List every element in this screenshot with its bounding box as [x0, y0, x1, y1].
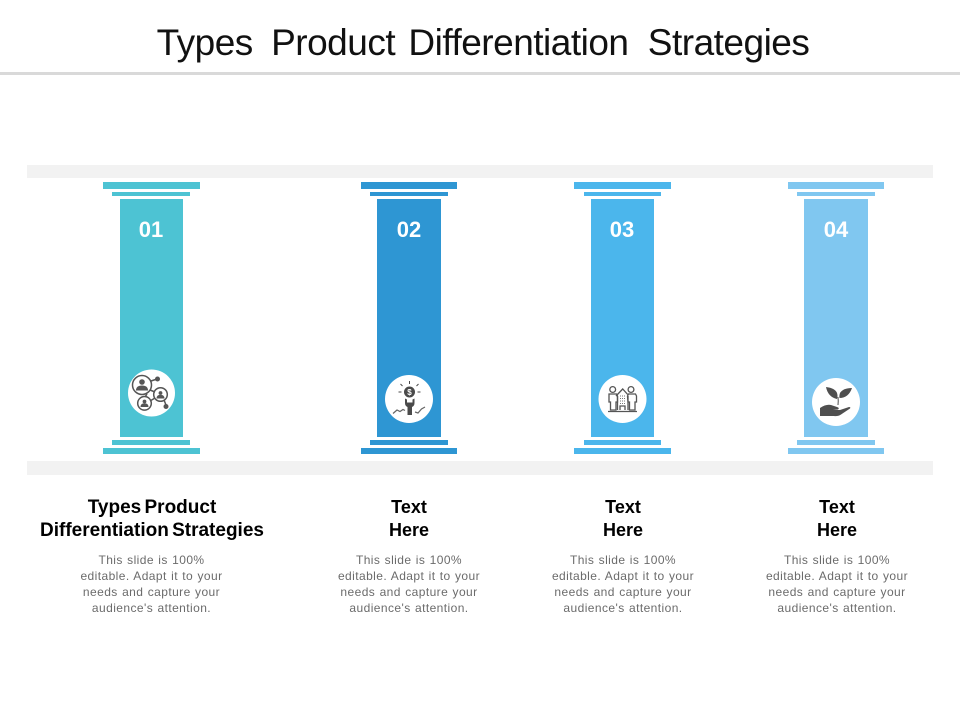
- title: Types Product Differentiation Strategies: [157, 22, 809, 63]
- heading 2: [389, 497, 429, 540]
- body text 4: editable. Adapt it to your: [766, 569, 908, 583]
- heading 3: [603, 497, 643, 540]
- body text 1: [80, 553, 223, 615]
- body text 3: [552, 553, 694, 615]
- heading 1: Types Product: [88, 497, 216, 518]
- body text 1: editable. Adapt it to your: [80, 569, 223, 583]
- body text 1: needs and capture your: [83, 585, 220, 599]
- icon: dollar bulb and wrench: $: [407, 388, 412, 397]
- title underline: [0, 72, 960, 75]
- heading 2: Here: [389, 520, 429, 540]
- body text 4: This slide is 100%: [784, 553, 890, 567]
- body text 2: [338, 553, 480, 615]
- bottom band: [27, 461, 933, 475]
- pillar 3: [574, 182, 671, 454]
- body text 4: audience's attention.: [777, 601, 897, 615]
- number 01: 01: [139, 217, 163, 242]
- heading 3: Text: [605, 497, 641, 517]
- number 02: 02: [397, 217, 421, 242]
- heading 1: [40, 497, 264, 541]
- body text 2: audience's attention.: [349, 601, 469, 615]
- body text 3: editable. Adapt it to your: [552, 569, 694, 583]
- body text 4: needs and capture your: [768, 585, 906, 599]
- pillar 2: [361, 182, 457, 454]
- heading 4: Here: [817, 520, 857, 540]
- heading 4: Text: [819, 497, 855, 517]
- heading 1: Differentiation Strategies: [40, 520, 264, 541]
- number 03: 03: [610, 217, 634, 242]
- body text 4: [766, 553, 908, 615]
- pillar 1: [103, 182, 200, 454]
- heading 3: Here: [603, 520, 643, 540]
- body text 3: This slide is 100%: [570, 553, 676, 567]
- body text 2: This slide is 100%: [356, 553, 462, 567]
- body text 3: audience's attention.: [563, 601, 683, 615]
- heading 2: Text: [391, 497, 427, 517]
- body text 2: editable. Adapt it to your: [338, 569, 480, 583]
- body text 1: audience's attention.: [92, 601, 211, 615]
- body text 1: This slide is 100%: [98, 553, 205, 567]
- top band: [27, 165, 933, 178]
- body text 3: needs and capture your: [554, 585, 692, 599]
- heading 4: [817, 497, 857, 540]
- number 04: 04: [824, 217, 848, 242]
- body text 2: needs and capture your: [340, 585, 478, 599]
- pillar 4: [788, 182, 884, 454]
